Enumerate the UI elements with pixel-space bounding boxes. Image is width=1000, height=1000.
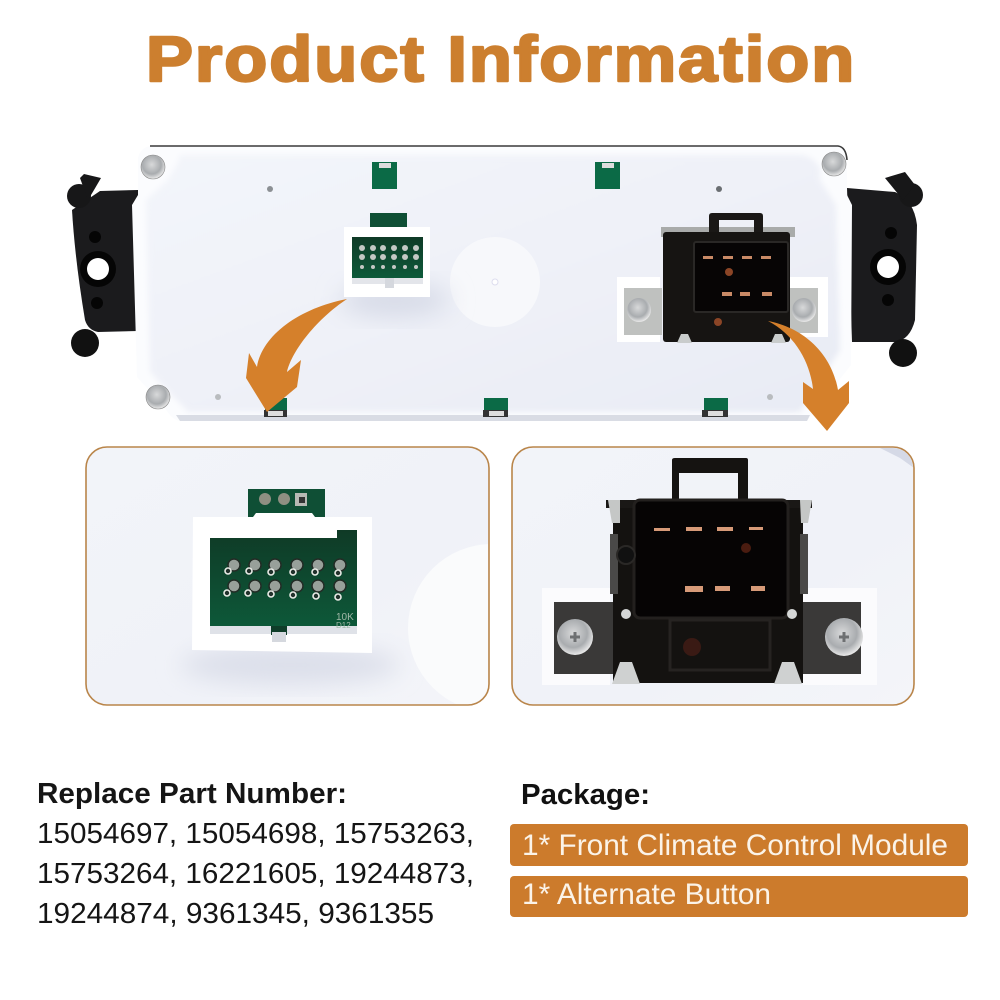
part number list xyxy=(37,818,474,930)
housing corner shade xyxy=(880,448,914,468)
arrow: right connector to detail xyxy=(768,321,849,431)
package item: alternate button: 1* Alternate Button xyxy=(522,878,771,911)
connector black body xyxy=(606,500,812,684)
part number list: 19244874, 9361345, 9361355 xyxy=(37,898,434,930)
part number section xyxy=(37,778,474,930)
heading: replace part number: Replace Part Number: xyxy=(37,778,347,810)
right mounting bracket xyxy=(847,172,923,367)
mounting tabs with screws xyxy=(542,588,877,685)
arrow: left connector to detail xyxy=(246,299,347,412)
title: Product Information xyxy=(146,24,856,95)
part number list: 15054697, 15054698, 15753263, xyxy=(37,818,474,850)
panel: power connector detail xyxy=(512,447,914,705)
white connector shell: D12 xyxy=(336,621,351,630)
pins: two rows of six xyxy=(224,559,346,600)
package item: alternate button xyxy=(510,876,968,917)
power connector small xyxy=(617,213,828,343)
left mounting bracket xyxy=(67,174,138,357)
connector shadow xyxy=(180,645,400,685)
green circuit board tabs xyxy=(264,162,728,417)
package item: climate control module: 1* Front Climate Control Module xyxy=(522,829,948,862)
panel: multi-pin connector detail xyxy=(85,446,490,706)
round knob boss xyxy=(450,237,540,327)
product photo: rear of climate control module xyxy=(67,146,923,431)
package section xyxy=(510,779,968,917)
connector socket with copper pins xyxy=(617,500,797,670)
heading: package: Package: xyxy=(521,779,650,811)
white connector shell: 10K xyxy=(336,612,354,623)
white connector shell xyxy=(192,513,372,653)
connector latch loop xyxy=(672,458,748,503)
top circuit board tab xyxy=(248,489,325,521)
module white housing xyxy=(132,146,852,421)
multi-pin connector small xyxy=(340,213,450,318)
housing screws xyxy=(141,152,846,409)
round knob boss detail xyxy=(408,544,488,704)
part number list: 15753264, 16221605, 19244873, xyxy=(37,858,474,890)
